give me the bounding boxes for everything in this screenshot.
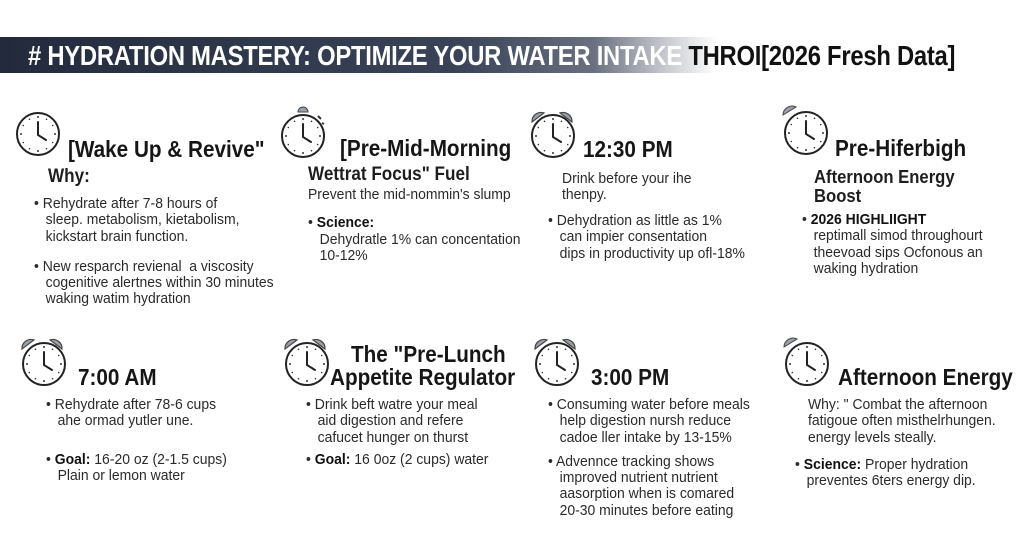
text block [306, 396, 488, 468]
bullet: dips in productivity up ofl-18% [560, 245, 745, 262]
bullet: • Science: Proper hydration [795, 456, 968, 473]
text block: • Goal: 16 0oz (2 cups) water [306, 451, 488, 468]
bullet: • Dehydration as little as 1% [548, 212, 722, 229]
icon: clock [16, 112, 60, 156]
subheading [814, 166, 955, 206]
text block: Prevent the mid-nommin's slump [308, 186, 511, 203]
text block: waking watim hydration [46, 290, 191, 307]
heading: Afternoon Energy [838, 364, 1013, 390]
text block: energy levels steally. [808, 429, 936, 446]
heading: The "Pre-Lunch [351, 341, 506, 367]
text block: waking hydration [814, 260, 918, 277]
text block: 20-30 minutes before eating [560, 502, 733, 519]
bullet [795, 456, 976, 489]
text block: cogenitive alertnes within 30 minutes [46, 274, 274, 291]
text block: • Goal: 16-20 oz (2-1.5 cups) [46, 451, 227, 468]
text block: • Consuming water before meals [548, 396, 750, 413]
text block: cadoe ller intake by 13-15% [560, 429, 732, 446]
title bar [0, 37, 1024, 73]
text block [308, 186, 520, 264]
panel: wake up [16, 112, 274, 307]
text block: • Science: [308, 214, 374, 231]
heading: 7:00 AM [78, 364, 157, 390]
subheading: Wettrat Focus" Fuel [308, 164, 470, 185]
text block: reptimall simod throughourt [814, 227, 983, 244]
panel: afternoon energy [784, 338, 1013, 489]
heading: [Wake Up & Revive" [68, 136, 265, 162]
text block [548, 396, 750, 519]
panel: 12:30 [531, 112, 745, 262]
text block: • Rehydrate after 7-8 hours of [34, 195, 217, 212]
icon: clock [21, 338, 66, 386]
text block: Dehydratle 1% can concentation [320, 231, 520, 248]
icon: clock [531, 112, 575, 158]
icon: clock [784, 338, 829, 386]
heading [330, 341, 515, 390]
heading: [Pre-Mid-Morning [340, 135, 511, 161]
text block: aasorption when is comared [560, 485, 734, 502]
subheading: Afternoon Energy [814, 166, 955, 187]
text block: • New resparch revienal a viscosity [34, 258, 254, 275]
title: # HYDRATION MASTERY: OPTIMIZE YOUR WATER INTAKE THROI[2026 Fresh Data] [28, 40, 955, 71]
text block: • 2026 HIGHLIIGHT [802, 211, 926, 228]
text block [34, 195, 274, 307]
panel: 3:00 PM [534, 338, 750, 519]
text block: sleep. metabolism, kietabolism, [46, 211, 239, 228]
text block: 10-12% [320, 247, 368, 264]
text block: • Drink beft watre your meal [306, 396, 478, 413]
text block: cafucet hunger on thurst [318, 429, 468, 446]
text block: • Advennce tracking shows [548, 453, 714, 470]
text block: thenpy. [562, 186, 607, 203]
text block: kickstart brain function. [46, 228, 188, 245]
text block: aid digestion and refere [318, 412, 463, 429]
icon: clock [782, 106, 828, 155]
text block: help digestion nursh reduce [560, 412, 731, 429]
bullet: can impier consentation [560, 228, 707, 245]
heading: Pre-Hiferbigh [835, 135, 966, 161]
panel: pre-afternoon boost [782, 106, 983, 277]
heading: 3:00 PM [591, 364, 669, 390]
panel: 7:00 AM [21, 338, 227, 484]
text block: Why: " Combat the afternoon [808, 396, 987, 413]
icon: clock [534, 338, 579, 386]
text block [562, 170, 691, 203]
text block: improved nutrient nutrient [560, 469, 718, 486]
panel: pre-lunch [284, 338, 515, 468]
text block [808, 396, 996, 446]
bullet: preventes 6ters energy dip. [807, 472, 976, 489]
text block: theevoad sips Ocfonous an [814, 244, 983, 261]
icon: clock [281, 106, 325, 158]
heading: Appetite Regulator [330, 364, 515, 390]
text block [802, 211, 983, 277]
panel: mid-morning [281, 106, 520, 264]
text block: Drink before your ihe [562, 170, 691, 187]
text block: Plain or lemon water [58, 467, 185, 484]
heading: 12:30 PM [583, 136, 673, 162]
icon: clock [284, 338, 329, 386]
subheading: Why: [48, 166, 90, 187]
text block: fatigoue often misthelrhungen. [808, 412, 996, 429]
text block [46, 396, 227, 484]
text block: • Rehydrate after 78-6 cups [46, 396, 216, 413]
subheading: Boost [814, 185, 861, 206]
bullet [548, 212, 745, 262]
text block: ahe ormad yutler une. [58, 412, 193, 429]
